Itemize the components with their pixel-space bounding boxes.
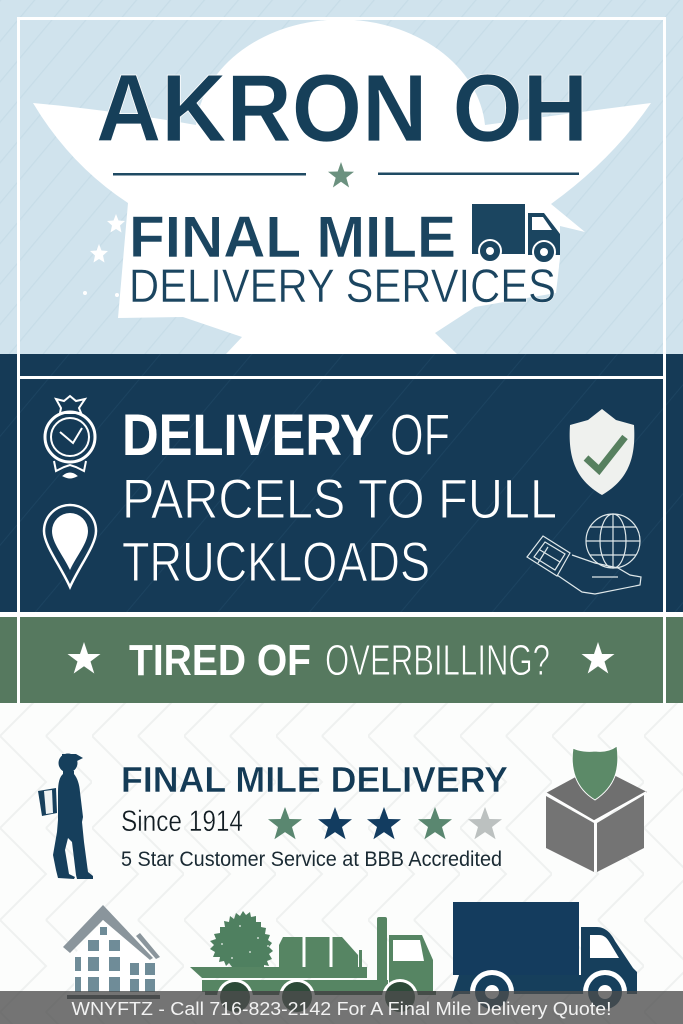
heading: Akron OH: AKRON OH xyxy=(96,55,588,162)
panel: header background xyxy=(0,0,683,355)
heading: final mile delivery: FINAL MILE DELIVERY xyxy=(121,759,508,800)
heading: delivery of parcels to full truckloads: OF xyxy=(390,403,450,468)
white star and globe backdrop xyxy=(33,20,651,354)
heading: delivery of parcels to full truckloads: PARCELS TO FULL xyxy=(122,467,557,530)
footer caption bar xyxy=(0,991,683,1024)
footer caption bar: WNYFTZ - Call 716-823-2142 For A Final Mile Delivery Quote! xyxy=(72,998,612,1019)
icon: box with shield xyxy=(546,746,647,872)
icon: navy box truck xyxy=(451,902,637,1014)
small white stars xyxy=(83,214,125,297)
heading: delivery of parcels to full truckloads: TRUCKLOADS xyxy=(122,530,430,593)
heading: Final Mile: FINAL MILE xyxy=(129,205,456,270)
icon: green flatbed truck xyxy=(190,911,436,1015)
heading: delivery of parcels to full truckloads xyxy=(122,403,557,593)
divider with star xyxy=(113,162,579,188)
icon: house xyxy=(63,905,160,999)
text: since 1914: Since 1914 xyxy=(121,805,243,838)
heading: tired of overbilling xyxy=(129,636,550,685)
white frame lines xyxy=(0,17,683,703)
star left xyxy=(68,642,100,674)
panel: navy delivery band xyxy=(0,354,683,612)
heading: Delivery Services: DELIVERY SERVICES xyxy=(129,259,556,312)
panel: lower white background xyxy=(0,703,683,1024)
heading: tired of overbilling: OVERBILLING? xyxy=(325,636,550,685)
icon: hand holding globe and device xyxy=(527,514,641,594)
icon: shield with check xyxy=(570,409,634,495)
panel: green overbilling band xyxy=(0,617,683,703)
rating stars xyxy=(268,807,502,839)
heading: delivery of parcels to full truckloads: DELIVERY xyxy=(122,403,374,468)
heading: tired of overbilling: TIRED OF xyxy=(129,636,311,685)
icon: location pin xyxy=(44,505,96,587)
icon: delivery person xyxy=(38,754,93,879)
icon: header truck xyxy=(472,204,560,263)
text: customer service accreditation: 5 Star Customer Service at BBB Accredited xyxy=(121,848,502,871)
icon: watch xyxy=(45,396,95,478)
star right xyxy=(582,642,614,674)
